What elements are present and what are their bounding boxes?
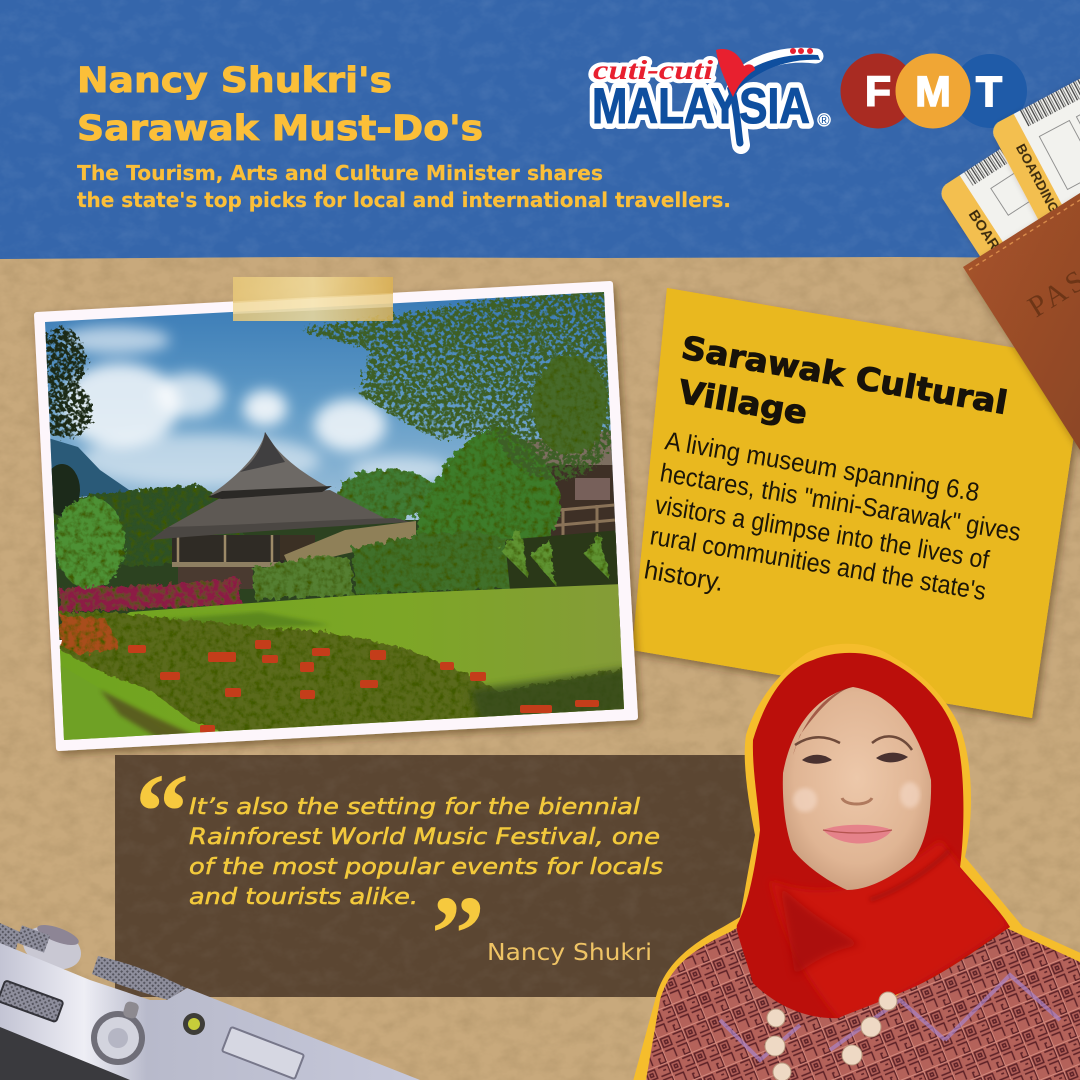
shutter button <box>91 1011 145 1065</box>
logo: FMT: T <box>976 68 1002 116</box>
clouds <box>60 326 450 486</box>
heading: note title: Sarawak Cultural <box>679 328 1010 422</box>
portrait outline <box>632 644 1080 1080</box>
logo: FMT: F <box>865 68 891 116</box>
camera dials <box>17 919 87 977</box>
building: roofed hall <box>150 432 410 589</box>
illustration: boarding passes and passport <box>937 47 1080 460</box>
text block: quote: It’s also the setting for the biennial <box>189 795 640 820</box>
blouse <box>646 928 1080 1080</box>
panel: yellow note <box>632 288 1080 718</box>
boarding pass: back <box>937 114 1080 290</box>
text block: attribution: Nancy Shukri <box>487 940 652 966</box>
boarding pass: back: BOARDING <box>965 207 1023 285</box>
control knurl <box>0 980 63 1022</box>
crimson hedge <box>60 578 240 612</box>
flower bushes <box>60 612 628 735</box>
mountain <box>48 438 132 500</box>
portrait: Nancy Shukri <box>632 644 1080 1080</box>
heading: note title: Village <box>676 372 810 432</box>
panel: photo frame <box>37 280 635 748</box>
text block: quote: and tourists alike. <box>189 885 418 910</box>
passport <box>963 193 1080 460</box>
round green tree <box>55 497 125 589</box>
text block: quote: Rainforest World Music Festival, one <box>189 825 660 850</box>
text block: quote <box>189 795 663 910</box>
top right tree canopy <box>300 280 620 480</box>
dark left foliage <box>37 328 93 438</box>
text block: subtitle: The Tourism, Arts and Culture Minister shares <box>77 161 603 185</box>
icon: three red dots <box>790 48 813 54</box>
panel: blue header band <box>0 0 1080 259</box>
decoration: tape <box>233 277 393 321</box>
heading: title: Nancy Shukri's <box>77 61 392 101</box>
green mid tree <box>416 425 562 540</box>
lawn <box>60 584 628 745</box>
eyebrows, eyes, nose and lips <box>793 736 920 844</box>
text block: note body: hectares, this "mini-Sarawak" gives <box>658 457 1023 547</box>
panel: quote box <box>115 753 765 997</box>
logo: Cuti-Cuti Malaysia: MALAYSIA <box>592 78 810 134</box>
right longhouse <box>526 430 616 550</box>
logo: FMT: M <box>915 68 951 116</box>
logo: FMT <box>840 54 1027 128</box>
registered mark: ® <box>818 112 830 129</box>
text block: note body: A living museum spanning 6.8 <box>663 425 982 507</box>
logo: Cuti-Cuti Malaysia: cuti-cuti <box>593 55 714 85</box>
illustration: camera <box>0 919 420 1080</box>
logo: Cuti-Cuti Malaysia <box>592 48 830 145</box>
hot shoe <box>222 1027 304 1079</box>
indicator light <box>183 1013 205 1035</box>
logo: Cuti-Cuti Malaysia: MALAYSIA <box>592 78 810 134</box>
icon: red hibiscus petals <box>716 49 755 97</box>
camera leather <box>0 1027 130 1080</box>
walkway fence <box>284 521 416 562</box>
face <box>783 687 931 890</box>
text block: subtitle: the state's top picks for local and international travellers. <box>77 188 731 212</box>
heading: title <box>77 61 483 149</box>
photo: Sarawak Cultural Village <box>37 280 630 745</box>
hijab <box>730 650 1020 1025</box>
icon: opening quote mark: “ <box>135 753 189 872</box>
text block: note body: rural communities and the state's <box>648 520 988 606</box>
text block: note body: visitors a glimpse into the lives of <box>653 489 992 575</box>
logo: Cuti-Cuti Malaysia: cuti-cuti <box>593 55 714 85</box>
camera body <box>0 943 420 1080</box>
icon: closing quote mark: ” <box>431 875 485 994</box>
text block: subtitle <box>77 161 731 212</box>
heading: title: Sarawak Must-Do's <box>77 109 483 149</box>
green hedges <box>252 555 354 600</box>
boarding pass: front <box>989 47 1080 237</box>
text block: note body <box>642 425 1023 606</box>
beads <box>765 992 897 1080</box>
text block: note body: history. <box>642 554 726 597</box>
far trees <box>48 485 250 570</box>
text block: quote: of the most popular events for locals <box>189 855 663 880</box>
boarding pass: front: BOARDING <box>1013 141 1063 216</box>
